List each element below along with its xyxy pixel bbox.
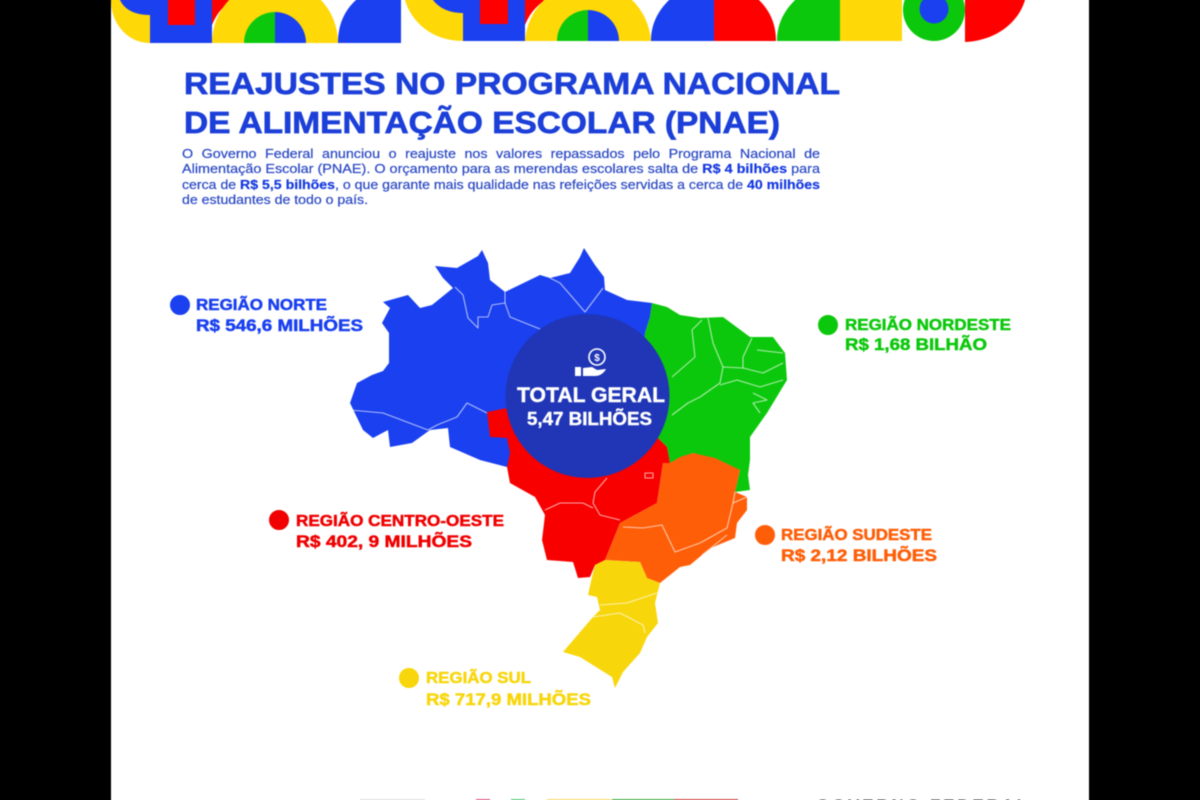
label: Região Centro-Oeste: REGIÃO CENTRO-OESTE (296, 510, 504, 530)
icon: hand holding coin: $ (594, 353, 600, 364)
intro paragraph: cerca de R$ 5,5 bilhões , o que garante mais qualidade nas refeições servidas a cerca de 40 milhões (182, 178, 820, 192)
intro paragraph: Alimentação Escolar (PNAE). O orçamento para as merendas escolares salta de R$ 4 bilhões para (182, 162, 820, 176)
title (184, 66, 840, 140)
label: Região Norte: R$ 546,6 MILHÕES (196, 315, 363, 335)
label: Região Sul (400, 667, 591, 709)
footer: cropped logo strip (360, 796, 1027, 800)
label: Região Nordeste: REGIÃO NORDESTE (845, 314, 1011, 334)
label: Região Sudeste: REGIÃO SUDESTE (781, 524, 932, 544)
label: Região Sudeste (756, 524, 937, 565)
label: Região Sudeste: R$ 2,12 BILHÕES (781, 545, 937, 565)
intro paragraph (182, 147, 820, 207)
region: Sul (yellow) (563, 560, 660, 688)
region: Nordeste (green) (640, 303, 787, 492)
label: Região Norte: REGIÃO NORTE (196, 294, 327, 314)
label: Região Nordeste: R$ 1,68 BILHÃO (845, 334, 987, 354)
label: Região Sul: R$ 717,9 MILHÕES (426, 689, 591, 709)
intro paragraph: de estudantes de todo o país. (182, 193, 368, 207)
intro paragraph: O Governo Federal anunciou o reajuste nos valores repassados pelo Programa Nacional de (182, 147, 820, 161)
label: Região Centro-Oeste: R$ 402, 9 MILHÕES (296, 531, 472, 551)
title: DE ALIMENTAÇÃO ESCOLAR (PNAE) (184, 105, 780, 140)
title: REAJUSTES NO PROGRAMA NACIONAL (184, 66, 840, 101)
map of Brazil by region (350, 248, 787, 688)
icon: hand holding coin (575, 349, 606, 376)
region: Sudeste (orange) (605, 453, 747, 583)
label: Região Sul: REGIÃO SUL (426, 667, 531, 687)
side bar: right black margin (1089, 0, 1200, 800)
total label: TOTAL GERAL (517, 384, 665, 407)
region: Norte (blue) (350, 248, 652, 467)
label: Região Norte (170, 294, 363, 335)
total circle (506, 314, 670, 478)
total value: 5,47 BILHÕES (527, 408, 652, 429)
decorative geometric banner (111, 0, 1025, 43)
label: Região Nordeste (818, 314, 1011, 354)
label: Região Centro-Oeste (270, 510, 504, 551)
region: Centro-Oeste (red) (487, 408, 670, 578)
